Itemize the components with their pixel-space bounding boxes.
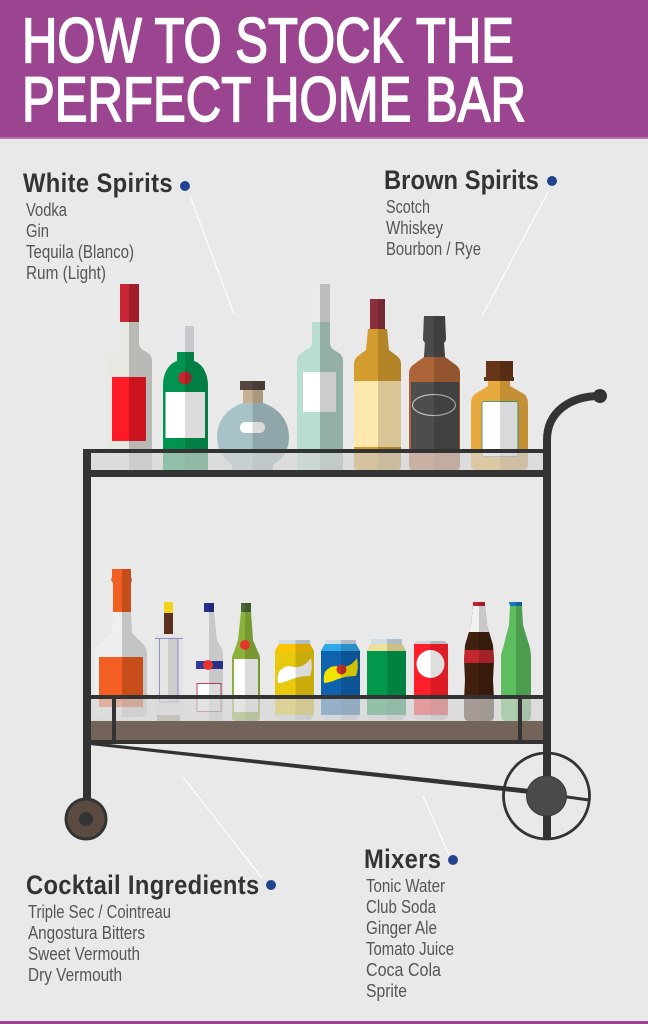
can: blue club soda	[321, 640, 360, 720]
icon: bar cart frame	[66, 389, 607, 839]
dot: mixers	[448, 855, 458, 865]
list: mixers: Tonic Water	[366, 875, 445, 896]
bottle: clear bitters	[155, 602, 183, 721]
list: white spirits: Vodka	[26, 199, 68, 220]
bottle: clear vermouth blue band	[196, 603, 223, 721]
list: white spirits: Gin	[26, 220, 49, 241]
panel: upper shelf bottles	[100, 280, 532, 475]
lower shelf rails	[83, 695, 551, 699]
list: brown spirits: Bourbon / Rye	[386, 238, 481, 259]
bottle: coca cola	[464, 602, 494, 721]
list: mixers	[366, 875, 454, 1001]
left wheel	[66, 799, 106, 839]
heading: cocktail ingredients: Cocktail Ingredients	[26, 871, 259, 900]
right wheel	[504, 452, 590, 839]
panel: cocktail ingredients text	[26, 871, 276, 985]
list: cocktail ingredients: Dry Vermouth	[28, 964, 122, 985]
bottle: black label whiskey	[409, 316, 460, 470]
bottle: amber whiskey	[354, 299, 401, 470]
list: white spirits: Rum (Light)	[26, 262, 106, 283]
header banner	[0, 0, 648, 139]
list: brown spirits: Whiskey	[386, 217, 444, 238]
list: white spirits: Tequila (Blanco)	[26, 241, 134, 262]
list: brown spirits: Scotch	[386, 196, 430, 217]
bottle: squat amber flask	[471, 361, 528, 470]
list: mixers: Coca Cola	[366, 959, 442, 980]
list: mixers: Club Soda	[366, 896, 437, 917]
heading: white spirits: White Spirits	[23, 169, 173, 198]
panel: mixers text	[364, 845, 458, 1001]
bottle: sprite	[501, 602, 531, 721]
can: red tomato juice	[414, 641, 448, 720]
list: cocktail ingredients: Triple Sec / Cointreau	[28, 901, 171, 922]
left post	[83, 449, 91, 799]
lower shelf wood tray	[91, 721, 543, 740]
bottle: orange liqueur	[99, 569, 147, 717]
list: white spirits	[26, 199, 134, 283]
list: mixers: Tomato Juice	[366, 938, 454, 959]
list: cocktail ingredients: Sweet Vermouth	[28, 943, 140, 964]
bottle: green vermouth	[232, 603, 260, 721]
upper shelf rails	[83, 449, 551, 453]
pointer line: cocktail ingredients	[183, 777, 262, 878]
list: cocktail ingredients: Angostura Bitters	[28, 922, 145, 943]
bottle: bitter red label	[112, 284, 152, 470]
panel: brown spirits text	[384, 166, 557, 259]
upper shelf glass	[91, 453, 543, 470]
dot: white spirits	[180, 181, 190, 191]
lower shelf glass	[91, 699, 543, 721]
list: brown spirits	[386, 196, 481, 259]
pointer line: brown spirits	[482, 192, 548, 316]
can: yellow tonic	[275, 640, 314, 720]
heading: brown spirits: Brown Spirits	[384, 166, 539, 195]
title	[22, 6, 526, 135]
dot: cocktail ingredients	[266, 880, 276, 890]
list: mixers: Sprite	[366, 980, 407, 1001]
panel: lower shelf bottles	[90, 565, 536, 725]
cart handle	[547, 396, 600, 452]
list: mixers: Ginger Ale	[366, 917, 437, 938]
title: HOW TO STOCK THE	[22, 6, 514, 76]
can: green ginger ale	[367, 639, 406, 720]
pointer line: mixers	[423, 796, 449, 855]
diagonal brace	[90, 742, 530, 794]
bottle: mint clear bottle	[297, 284, 343, 470]
dot: brown spirits	[547, 176, 557, 186]
pointer line: white spirits	[190, 196, 234, 314]
heading: mixers: Mixers	[364, 845, 441, 874]
panel: white spirits text	[23, 169, 190, 283]
bottle: round blue decanter	[217, 381, 289, 470]
list: cocktail ingredients	[28, 901, 171, 985]
bottom rule	[0, 1021, 648, 1024]
bottle: green gin	[163, 326, 208, 470]
